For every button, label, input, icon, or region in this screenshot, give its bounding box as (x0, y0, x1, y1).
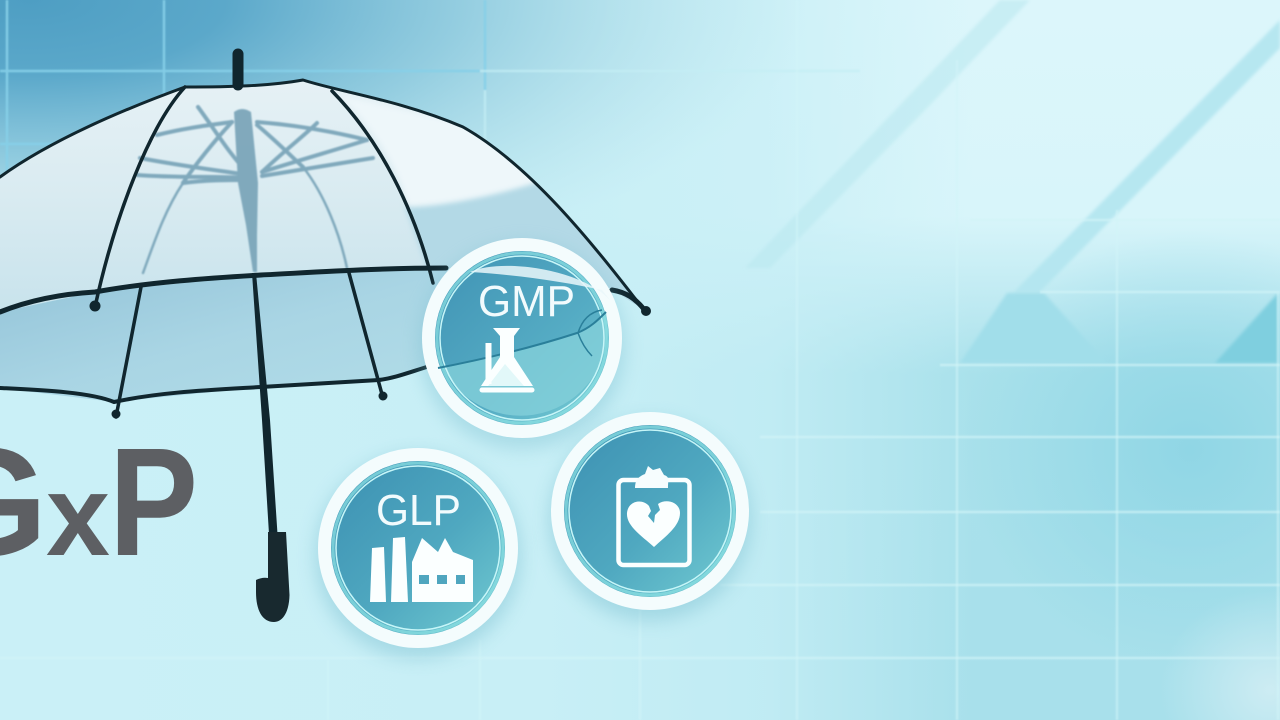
crack line (438, 310, 606, 368)
title: GxP: x (46, 452, 110, 580)
handle (256, 532, 290, 622)
title: GxP: P (109, 416, 198, 588)
badge: clipboard (549, 412, 751, 621)
diagonal bars (745, 0, 1280, 363)
icon: factory (370, 537, 473, 602)
inner frame shadow (137, 107, 373, 273)
icon: flask (481, 328, 533, 390)
label: GMP (478, 277, 575, 326)
canopy right panel shading (350, 100, 637, 306)
canopy overlap (470, 266, 610, 300)
umbrella (0, 54, 660, 622)
badge: GMP (419, 238, 625, 449)
outline and ribs (0, 80, 646, 417)
canopy upper (0, 80, 644, 312)
badge: GLP (315, 448, 521, 659)
icon: clipboard with heart (618, 466, 690, 565)
top ferrule (232, 54, 244, 85)
canopy lower panels (0, 268, 470, 402)
shaft (252, 273, 278, 534)
lighter lower half (443, 312, 608, 416)
title: GxP (0, 416, 198, 588)
label: GLP (376, 486, 461, 535)
